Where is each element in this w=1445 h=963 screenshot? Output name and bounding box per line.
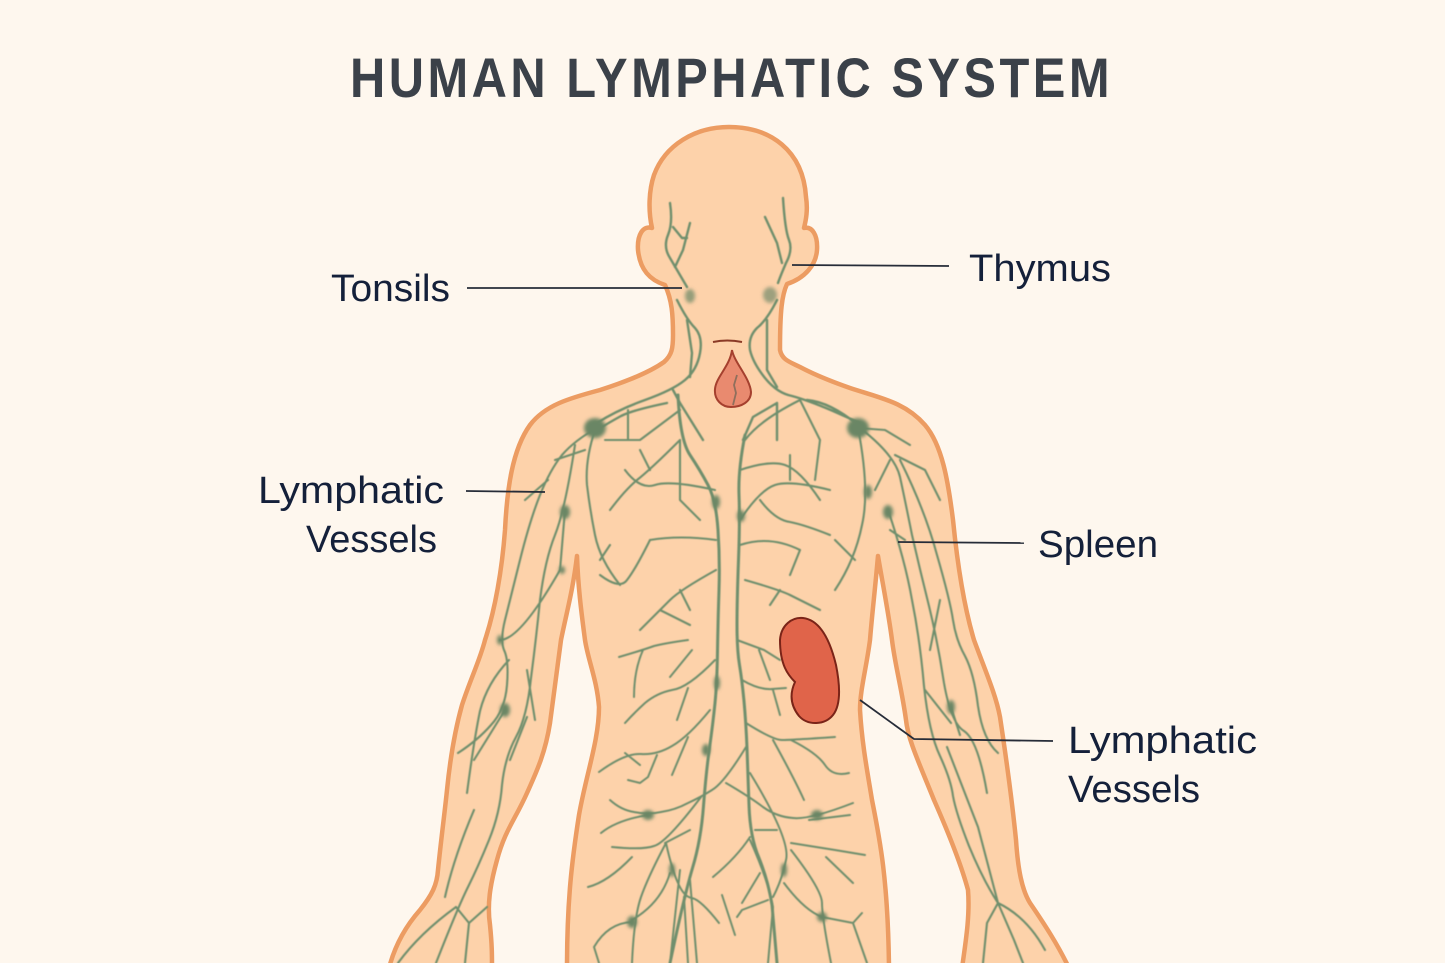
label: Lymphatic Vessels left: Vessels: [306, 519, 437, 561]
body silhouette: [389, 127, 1069, 963]
central trunks: [670, 395, 777, 963]
upper torso branches: [587, 400, 865, 630]
left arm vessels: [398, 428, 597, 963]
label: Lymphatic Vessels left: [258, 470, 545, 561]
label: Spleen: Spleen: [1038, 524, 1158, 566]
label: Lymphatic Vessels right: [860, 700, 1257, 811]
thymus organ: [713, 340, 751, 407]
lymph nodes: [497, 287, 955, 928]
label: Thymus: Thymus: [969, 248, 1111, 290]
neck and head vessels: [597, 198, 860, 440]
lower torso branches: [588, 640, 867, 963]
spleen organ: [780, 618, 839, 723]
title: HUMAN LYMPHATIC SYSTEM: [350, 46, 1113, 109]
right arm vessels: [858, 428, 1045, 963]
label: Lymphatic Vessels left: Lymphatic: [258, 470, 444, 512]
label: Lymphatic Vessels right: Lymphatic: [1068, 720, 1257, 762]
label: Tonsils: Tonsils: [331, 268, 450, 310]
lymphatic vessel network: [398, 198, 1045, 963]
label: Lymphatic Vessels right: Vessels: [1068, 769, 1200, 811]
